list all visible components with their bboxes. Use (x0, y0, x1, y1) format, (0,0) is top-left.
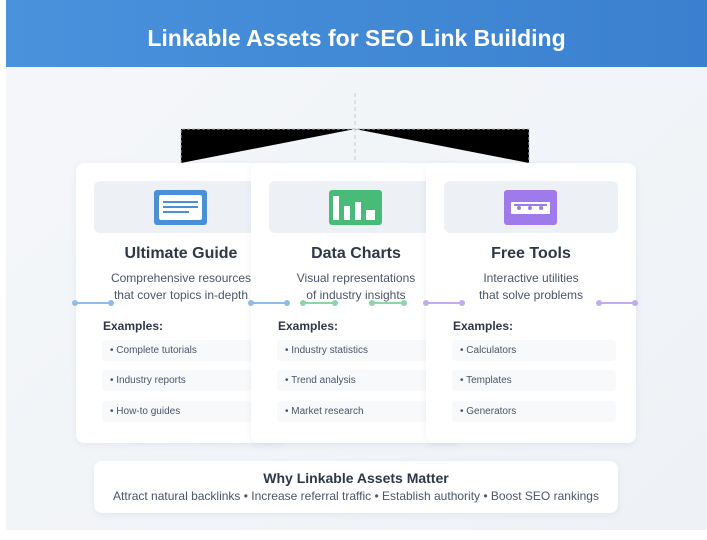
panel: free tools: • Templates (460, 375, 512, 386)
icon: tool (444, 181, 618, 233)
connectors (72, 300, 638, 306)
panel: data charts: Examples: (278, 319, 338, 333)
panel: ultimate guide: • How-to guides (110, 406, 180, 417)
panel: data charts: Data Charts (311, 245, 401, 262)
panel: free tools: Interactive utilities (483, 271, 579, 285)
panel: free tools: Examples: (453, 319, 513, 333)
panel: ultimate guide: Examples: (103, 319, 163, 333)
panel: data charts (251, 163, 461, 443)
panel: free tools: that solve problems (479, 288, 583, 302)
title: Linkable Assets for SEO Link Building (147, 25, 566, 51)
callout: why linkable assets matter: Attract natural backlinks • Increase referral traffic • Establish authority • Boost SEO rankings (113, 489, 599, 503)
callout: why linkable assets matter: Why Linkable Assets Matter (263, 470, 449, 486)
panel: ultimate guide (76, 163, 286, 443)
panel: ultimate guide: Ultimate Guide (125, 245, 237, 262)
panel: ultimate guide: • Industry reports (110, 375, 186, 386)
panel: data charts: of industry insights (306, 288, 406, 302)
panel: free tools (426, 163, 636, 443)
icon: bar chart (269, 181, 443, 233)
panel: data charts: Visual representations (297, 271, 415, 285)
icon: document (94, 181, 268, 233)
panel: ultimate guide: Comprehensive resources (111, 271, 251, 285)
panel: ultimate guide: • Complete tutorials (110, 345, 197, 356)
title (6, 0, 707, 67)
panel: ultimate guide: that cover topics in-depth (114, 288, 248, 302)
panel: free tools: • Generators (460, 406, 516, 417)
callout: why linkable assets matter (94, 461, 618, 513)
panel: data charts: • Trend analysis (285, 375, 356, 386)
panel: free tools: Free Tools (491, 245, 571, 262)
panel: free tools: • Calculators (460, 345, 516, 356)
panel: data charts: • Market research (285, 406, 364, 417)
panel: data charts: • Industry statistics (285, 345, 368, 356)
